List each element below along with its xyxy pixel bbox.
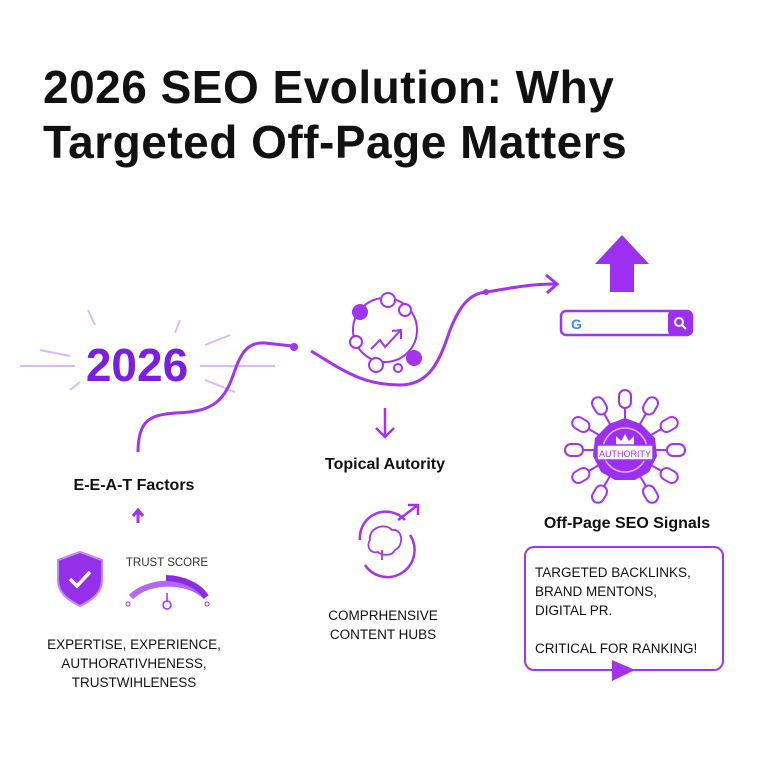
year 2026: 2026 bbox=[86, 339, 188, 391]
gauge bbox=[126, 578, 209, 609]
text box bbox=[525, 547, 723, 670]
off-page list bbox=[535, 565, 697, 656]
title: 2026 SEO Evolution: Why bbox=[43, 61, 614, 113]
E-E-A-T description: AUTHORATIVHENESS, bbox=[61, 656, 207, 671]
E-E-A-T description: TRUSTWIHLENESS bbox=[72, 675, 196, 690]
search bar bbox=[561, 311, 692, 335]
E-E-A-T up arrow bbox=[133, 510, 143, 523]
authority badge: AUTHORITY bbox=[599, 449, 651, 459]
network icon bbox=[350, 293, 421, 372]
down arrow bbox=[376, 408, 394, 437]
authority badge bbox=[565, 390, 685, 505]
content hubs text: CONTENT HUBS bbox=[330, 627, 436, 642]
big up arrow bbox=[595, 235, 649, 292]
content hubs text bbox=[328, 608, 438, 642]
title bbox=[43, 61, 627, 168]
curve 1 bbox=[138, 343, 292, 452]
topical heading: Topical Autority bbox=[325, 456, 445, 473]
E-E-A-T description bbox=[47, 637, 221, 690]
off-page list: BRAND MENTONS, bbox=[535, 584, 657, 599]
shield icon bbox=[58, 552, 102, 606]
play arrow bbox=[612, 660, 635, 681]
title: Targeted Off-Page Matters bbox=[43, 116, 627, 168]
off-page list: TARGETED BACKLINKS, bbox=[535, 565, 691, 580]
burst bbox=[20, 310, 275, 392]
off-page heading: Off-Page SEO Signals bbox=[544, 515, 710, 532]
E-E-A-T description: EXPERTISE, EXPERIENCE, bbox=[47, 637, 221, 652]
trust score label: TRUST SCORE bbox=[126, 557, 208, 569]
off-page list: DIGITAL PR. bbox=[535, 603, 612, 618]
E-E-A-T heading: E-E-A-T Factors bbox=[74, 477, 194, 494]
search bar: G bbox=[571, 316, 582, 332]
curve 2 with arrow bbox=[311, 284, 556, 385]
content hubs text: COMPRHENSIVE bbox=[328, 608, 438, 623]
off-page list: CRITICAL FOR RANKING! bbox=[535, 641, 697, 656]
brain icon bbox=[360, 505, 418, 577]
